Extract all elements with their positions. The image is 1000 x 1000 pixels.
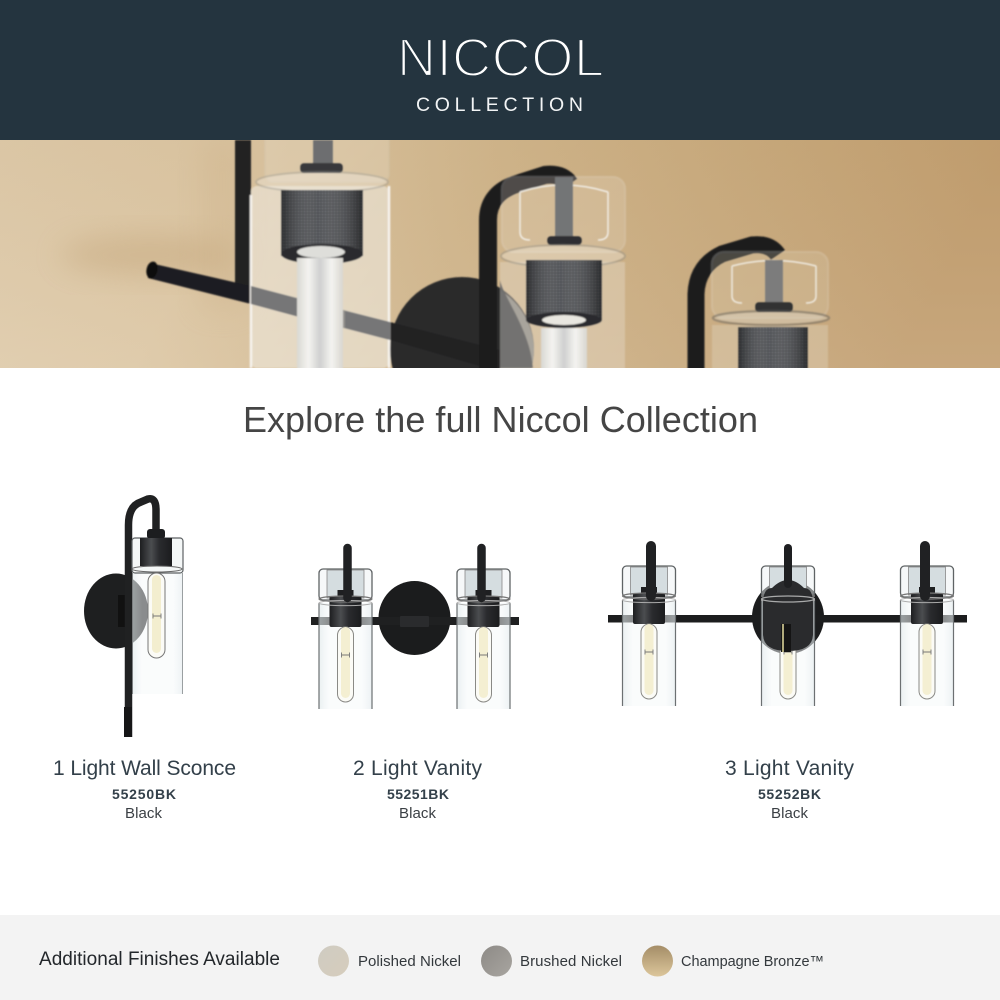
swatch: champagne bronze: [642, 946, 824, 976]
finish: Black: [125, 805, 162, 822]
vanity illustration: [608, 544, 967, 706]
name: 3 Light Vanity: [725, 757, 854, 780]
lamp 3: [712, 252, 829, 372]
section heading: Explore the full Niccol Collection: [243, 399, 758, 440]
left vertical arm: [235, 140, 251, 298]
finish: Black: [771, 805, 808, 822]
name: 2 Light Vanity: [353, 757, 482, 780]
name: 1 Light Wall Sconce: [53, 757, 236, 780]
model number: 55251BK: [387, 786, 449, 802]
swatch: brushed nickel: [481, 946, 622, 976]
right curved arm: [696, 245, 778, 372]
middle curved arm: [488, 175, 570, 372]
product: 3 light vanity: [608, 544, 967, 822]
swatch: champagne bronze: Champagne Bronze™: [681, 954, 824, 970]
sconce illustration: [84, 499, 183, 737]
crossbar: [148, 263, 251, 304]
title: NICCOL: [397, 28, 604, 88]
swatch: polished nickel: [318, 946, 461, 976]
header band: [0, 0, 1000, 140]
swatch: brushed nickel: Brushed Nickel: [520, 953, 622, 970]
footer label: Additional Finishes Available: [39, 949, 280, 970]
model number: 55252BK: [758, 786, 821, 802]
model number: 55250BK: [112, 786, 176, 802]
product: 1 light wall sconce: [53, 499, 236, 822]
lamp 1: [251, 130, 390, 370]
finishes footer: [0, 915, 1000, 1000]
product: 2 light vanity: [311, 548, 519, 822]
swatch: polished nickel: Polished Nickel: [358, 953, 461, 970]
lamp 2: [500, 177, 625, 370]
backplate: [389, 276, 534, 368]
subtitle: COLLECTION: [416, 94, 583, 116]
finish: Black: [399, 805, 436, 822]
vanity illustration: [311, 548, 519, 709]
hero photo of wall lights: [0, 140, 1000, 368]
